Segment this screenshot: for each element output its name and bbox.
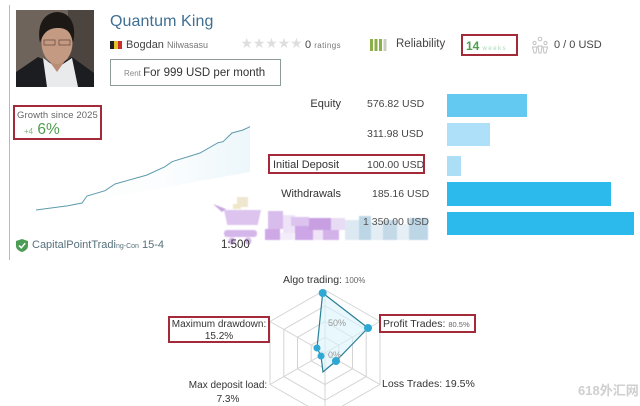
callout: maximum drawdown: Maximum drawdown: (172, 319, 266, 330)
stat: second value: 311.98 USD (367, 128, 423, 140)
panel: trading account row (16, 239, 250, 252)
bar: equity (447, 94, 527, 117)
broker server name: CapitalPointTrading-Con 15-4 (32, 239, 164, 251)
deposit value: 100.00 USD (367, 159, 424, 171)
icon: reliability bars (370, 39, 386, 51)
growth label: Growth since 2025 (17, 110, 98, 121)
profit trades label: Profit Trades: 80.5% (383, 318, 470, 330)
author name: Bogdan Nilwasasu (126, 39, 208, 51)
callout: initial deposit (268, 154, 425, 174)
radar label: loss trades: Loss Trades: 19.5% (382, 378, 475, 390)
stat: withdrawals label: Withdrawals (281, 188, 341, 200)
icon: flag (110, 41, 122, 49)
icon: verified shield (16, 239, 28, 252)
watermark text: 618外汇网 (578, 383, 639, 398)
bar: deposits (447, 212, 634, 235)
bar: withdrawals (447, 182, 611, 206)
radar label: max deposit load (189, 380, 267, 405)
bar: second stat (447, 123, 490, 146)
callout: maximum drawdown: 15.2% (205, 331, 233, 342)
bar: initial deposit (447, 156, 461, 176)
title: Quantum King (110, 13, 213, 30)
leverage: 1:500 (221, 239, 250, 251)
radar chart: 50% (328, 318, 346, 328)
radar chart (270, 289, 380, 406)
callout: maximum drawdown (168, 316, 270, 343)
line chart: balance growth (36, 126, 250, 210)
panel: radar chart (168, 274, 476, 406)
radar chart: 0% (328, 350, 341, 360)
growth value: +4 6% (24, 121, 60, 138)
radar label: max deposit load: 7.3% (217, 394, 239, 405)
stat: withdrawals value: 185.16 USD (372, 188, 429, 200)
panel: growth chart (13, 105, 250, 210)
subscribe button (110, 59, 281, 86)
icon: author portrait (16, 10, 94, 87)
deposit label: Initial Deposit (273, 159, 339, 171)
radar label: max deposit load: Max deposit load: (189, 380, 267, 391)
stat: deposits value: 1 350.00 USD (363, 216, 429, 228)
stat: equity value: 576.82 USD (367, 98, 424, 110)
left accent line (9, 5, 10, 260)
radar label: algo trading: Algo trading: 100% (283, 274, 365, 286)
panel: profile header (16, 10, 602, 87)
weeks value: 14 weeks (466, 39, 507, 53)
callout: growth since 2025 (13, 105, 102, 140)
icon: rating stars: ★★★★★ (241, 38, 303, 50)
callout: profit trades (379, 314, 476, 333)
subscribers and funds: 0 / 0 USD (554, 39, 602, 51)
icon: subscribers (532, 36, 548, 54)
panel: account stats (268, 94, 634, 235)
callout: weeks (461, 34, 518, 56)
stat: equity label: Equity (310, 98, 341, 110)
button label: Rent For 999 USD per month (124, 67, 265, 79)
ratings count: 0 ratings (305, 39, 341, 51)
reliability label: Reliability (396, 38, 445, 50)
